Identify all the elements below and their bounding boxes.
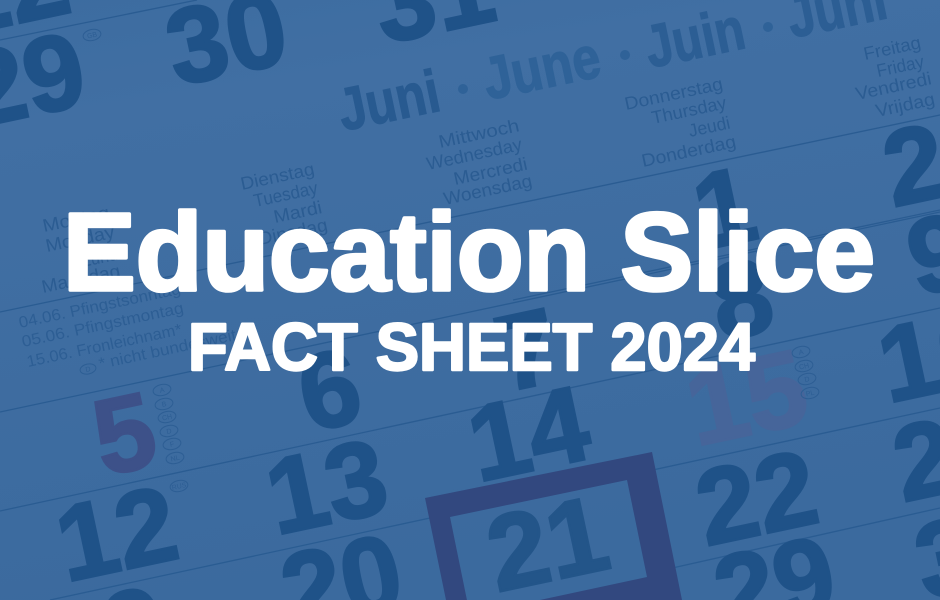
country code badges: CH — [799, 363, 810, 371]
weekday labels — [40, 32, 937, 297]
country code badges: D — [166, 428, 172, 436]
country code badges: B — [161, 401, 168, 409]
weekday labels: Montag — [41, 202, 111, 236]
country code badges: A — [159, 387, 166, 395]
holiday day numbers — [83, 326, 817, 498]
country code badges: PL — [805, 390, 815, 398]
weekday labels: Dinsdag — [257, 215, 329, 249]
holiday notes: 05.06. Pfingstmontag — [20, 300, 185, 351]
month heading: Juni June Juin Juni — [332, 0, 893, 144]
weekday labels: Lundi — [80, 243, 123, 271]
country code badges: NL — [170, 455, 180, 463]
weekday labels: Woensdag — [442, 171, 534, 209]
country code badges: A — [798, 349, 805, 357]
weekday labels: Vendredi — [854, 68, 933, 104]
weekday labels: Wednesday — [425, 134, 524, 174]
country code badges — [79, 28, 820, 493]
weekday labels: Monday — [44, 222, 116, 256]
weekday labels: Donnerstag — [623, 74, 725, 114]
weekday labels: Tuesday — [252, 178, 319, 211]
weekday labels: Donderdag — [640, 131, 738, 171]
country code badges: F — [169, 441, 175, 449]
country code badges: RUS — [171, 482, 187, 492]
weekday labels: Mardi — [272, 197, 324, 227]
calendar day numbers: 8 — [700, 234, 783, 363]
weekday labels: Thursday — [650, 93, 728, 128]
weekday labels: Maandag — [40, 261, 122, 297]
weekday labels: Vrijdag — [874, 89, 937, 121]
month heading: Juni June Juin Juni: June — [477, 23, 606, 113]
title: Education Slice — [63, 191, 875, 314]
weekday labels: Friday — [875, 51, 926, 81]
calendar day numbers: 6 — [288, 325, 371, 454]
country code badges: D — [85, 366, 91, 374]
holiday day numbers: 15 — [676, 326, 817, 468]
country code badges: D — [804, 376, 810, 384]
calendar day numbers: 14 — [458, 362, 599, 504]
holiday notes: * nicht bundesweit — [97, 327, 238, 373]
holiday notes — [17, 281, 238, 373]
weekday labels: Mercredi — [452, 154, 529, 189]
weekday labels: Mittwoch — [437, 115, 521, 152]
holiday day numbers: 5 — [83, 369, 166, 498]
calendar day numbers: 22 — [686, 426, 827, 568]
weekday labels: Jeudi — [687, 113, 732, 141]
calendar day numbers: 1 — [683, 143, 766, 272]
country code badges: GB — [87, 31, 98, 40]
calendar day numbers: 7 — [485, 285, 568, 414]
subtitle: FACT SHEET 2024 — [188, 310, 755, 385]
calendar day numbers: 13 — [256, 415, 397, 557]
highlighted date frame around 21 — [425, 452, 682, 600]
weekday labels: Freitag — [862, 32, 923, 64]
holiday notes: 15.06. Fronleichnam* — [25, 321, 183, 371]
weekday labels: Dienstag — [239, 159, 316, 194]
month heading: Juni June Juin Juni: Juni — [332, 57, 446, 144]
holiday notes: 04.06. Pfingstsonntag — [17, 281, 182, 332]
country code badges: CH — [162, 414, 173, 422]
